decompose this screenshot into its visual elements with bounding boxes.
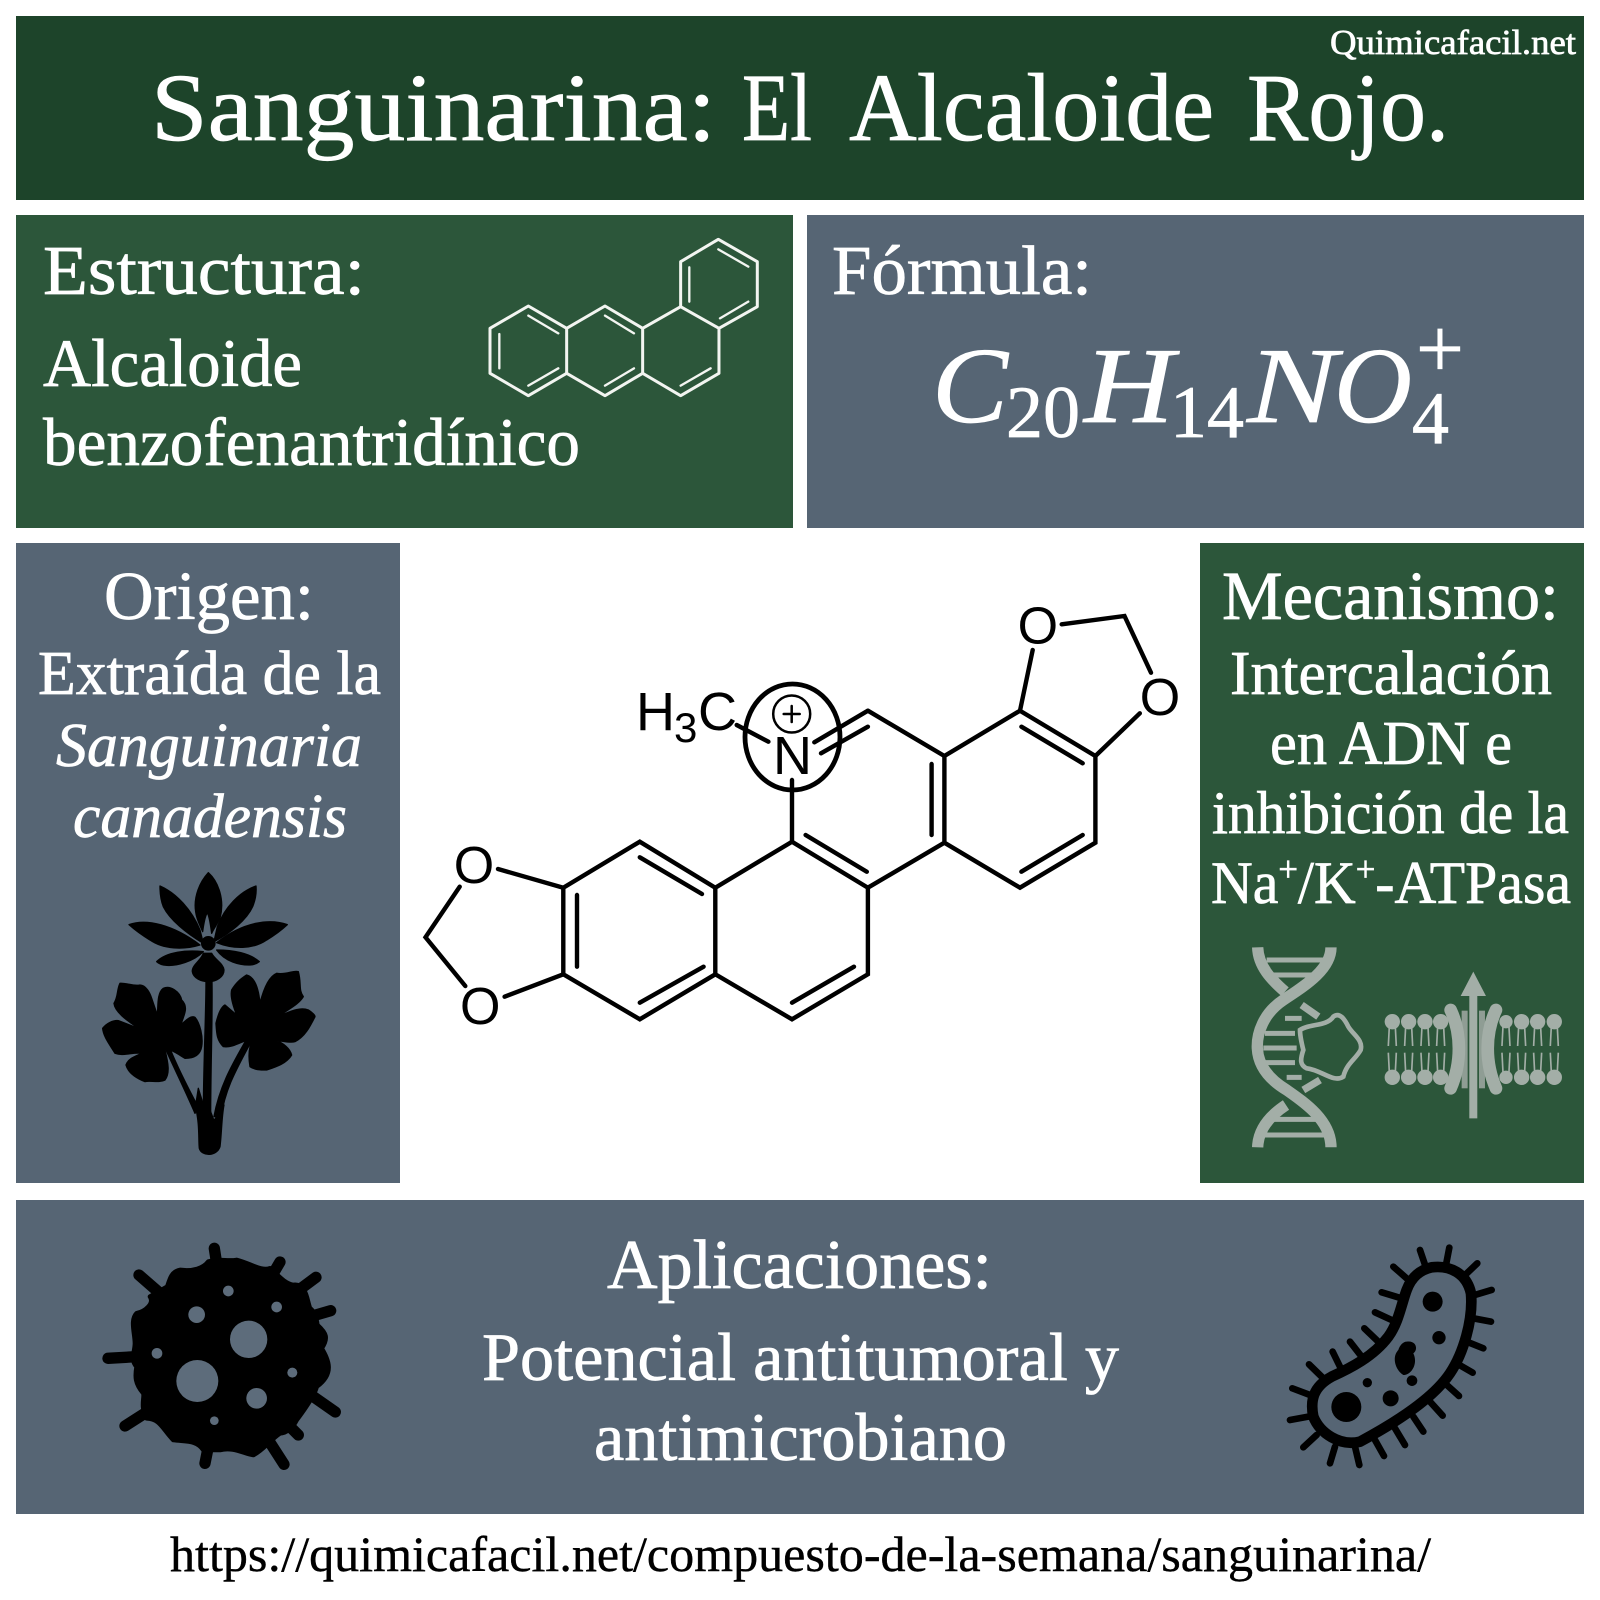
text: alcaloide benzofenantridinico [43, 325, 580, 480]
text: origin of the plant: canadensis [73, 783, 347, 851]
atom labels: O [460, 978, 500, 1036]
title: El [742, 54, 812, 161]
panel: mecanismo [1200, 543, 1584, 1183]
chemical formula: + [1416, 302, 1464, 396]
chemical formula: 4 [1412, 378, 1449, 460]
molecule: sanguinarine structure [426, 598, 1180, 1036]
ring bonds [563, 711, 1095, 1019]
text: mechanism: /K [1298, 850, 1356, 916]
text: alcaloide benzofenantridinico: Alcaloide [43, 325, 302, 401]
heading: formula: Fórmula: [832, 233, 1092, 310]
heading: mecanismo: Mecanismo: [1222, 558, 1559, 634]
text: applications [482, 1319, 1119, 1475]
text: mechanism: -ATPasa [1375, 850, 1571, 916]
atom labels: O [1018, 598, 1058, 656]
atom labels: N [773, 726, 812, 786]
text: mechanism: Intercalación [1230, 640, 1552, 708]
panel: title banner [16, 16, 1584, 200]
title [151, 54, 1449, 161]
heading: origen: Origen: [104, 558, 314, 634]
site name: Quimicafacil.net [1330, 23, 1576, 62]
chemical formula: C [932, 327, 1010, 446]
charge symbol [773, 696, 810, 732]
chemical formula: 14 [1170, 372, 1244, 454]
text: mechanism: Na [1211, 850, 1281, 916]
icon: tumor cell silhouette [108, 1248, 335, 1464]
text: mechanism [1211, 640, 1571, 916]
icon: polycyclic ring skeleton [490, 239, 757, 396]
icon: plant silhouette [103, 873, 315, 1154]
text: mechanism: + [1356, 849, 1375, 889]
atom labels: H [636, 682, 675, 742]
panel: aplicaciones [16, 1200, 1584, 1514]
title: Rojo. [1247, 54, 1449, 161]
text: origin of the plant: Sanguinaria [56, 712, 362, 780]
icon: bacterium [1290, 1248, 1492, 1465]
atom labels: O [1140, 669, 1180, 727]
icon: DNA with intercalator [1257, 947, 1361, 1147]
panel: formula [807, 215, 1584, 528]
chemical formula: H [1082, 327, 1180, 446]
heading: aplicaciones: Aplicaciones: [607, 1227, 992, 1304]
heading: estructura: Estructura: [43, 233, 365, 310]
chemical formula: 20 [1006, 372, 1080, 454]
atom labels: 3 [674, 704, 697, 751]
text: mechanism: + [1278, 849, 1298, 889]
atom labels: O [454, 837, 494, 895]
text: applications: Potencial antitumoral y [482, 1319, 1119, 1395]
icon: membrane ion pump [1385, 972, 1562, 1118]
chemical formula: N [1246, 327, 1344, 446]
atom labels [454, 598, 1180, 1036]
chemical formula: O [1334, 327, 1412, 446]
panel: estructura [16, 215, 793, 528]
text: origin of the plant: Extraída de la [38, 640, 381, 708]
panel: origen [16, 543, 400, 1183]
title: Alcaloide [849, 54, 1214, 161]
atom labels: C [698, 682, 737, 742]
text: alcaloide benzofenantridinico: benzofenantridínico [43, 404, 580, 480]
title: Sanguinarina: [151, 54, 716, 161]
highlight ellipse around N+ [745, 684, 840, 790]
text: mechanism: inhibición de la [1212, 780, 1569, 846]
chemical formula [932, 302, 1464, 460]
text: applications: antimicrobiano [594, 1399, 1007, 1475]
double bonds [577, 711, 1083, 1003]
nitrogen and dioxole bonds [426, 616, 1151, 997]
text: mechanism: en ADN e [1270, 710, 1512, 778]
source URL: https://quimicafacil.net/compuesto-de-la-semana/sanguinarina/ [170, 1526, 1431, 1582]
text: origin of the plant [38, 640, 381, 851]
